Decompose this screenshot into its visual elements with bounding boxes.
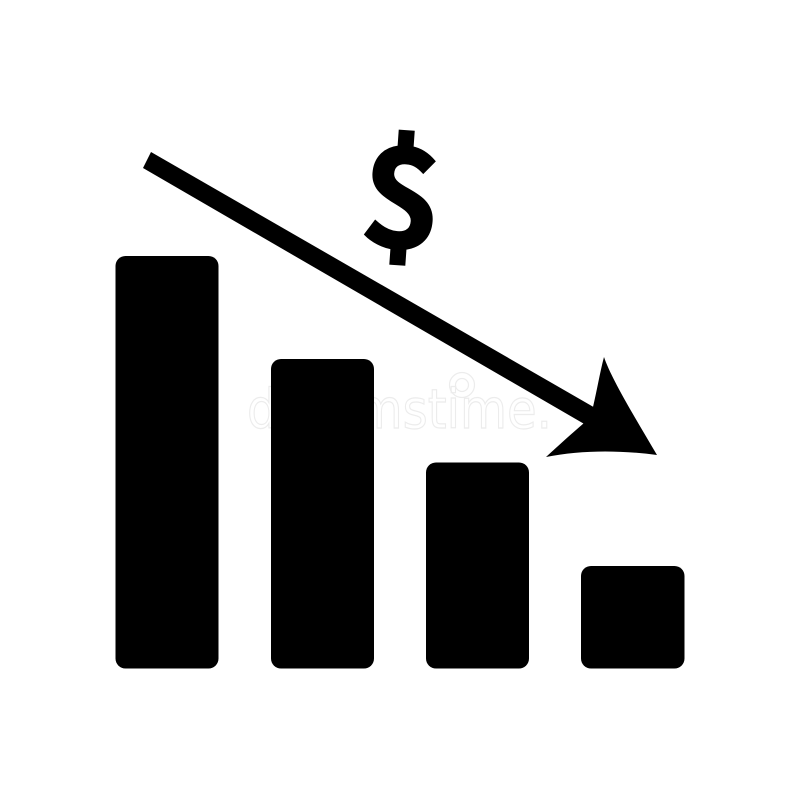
arrow head	[546, 357, 657, 457]
bar 3	[426, 462, 529, 668]
bar 2	[271, 359, 374, 668]
watermark	[247, 372, 552, 441]
arrow shaft	[143, 152, 597, 425]
dollar sign: $	[355, 87, 450, 290]
arrow: downward trend	[143, 152, 657, 457]
bar 4	[581, 566, 684, 668]
bar 1	[116, 256, 218, 668]
bar chart	[116, 256, 684, 668]
watermark spiral	[450, 372, 474, 398]
watermark text: dreamstime.	[247, 378, 552, 441]
